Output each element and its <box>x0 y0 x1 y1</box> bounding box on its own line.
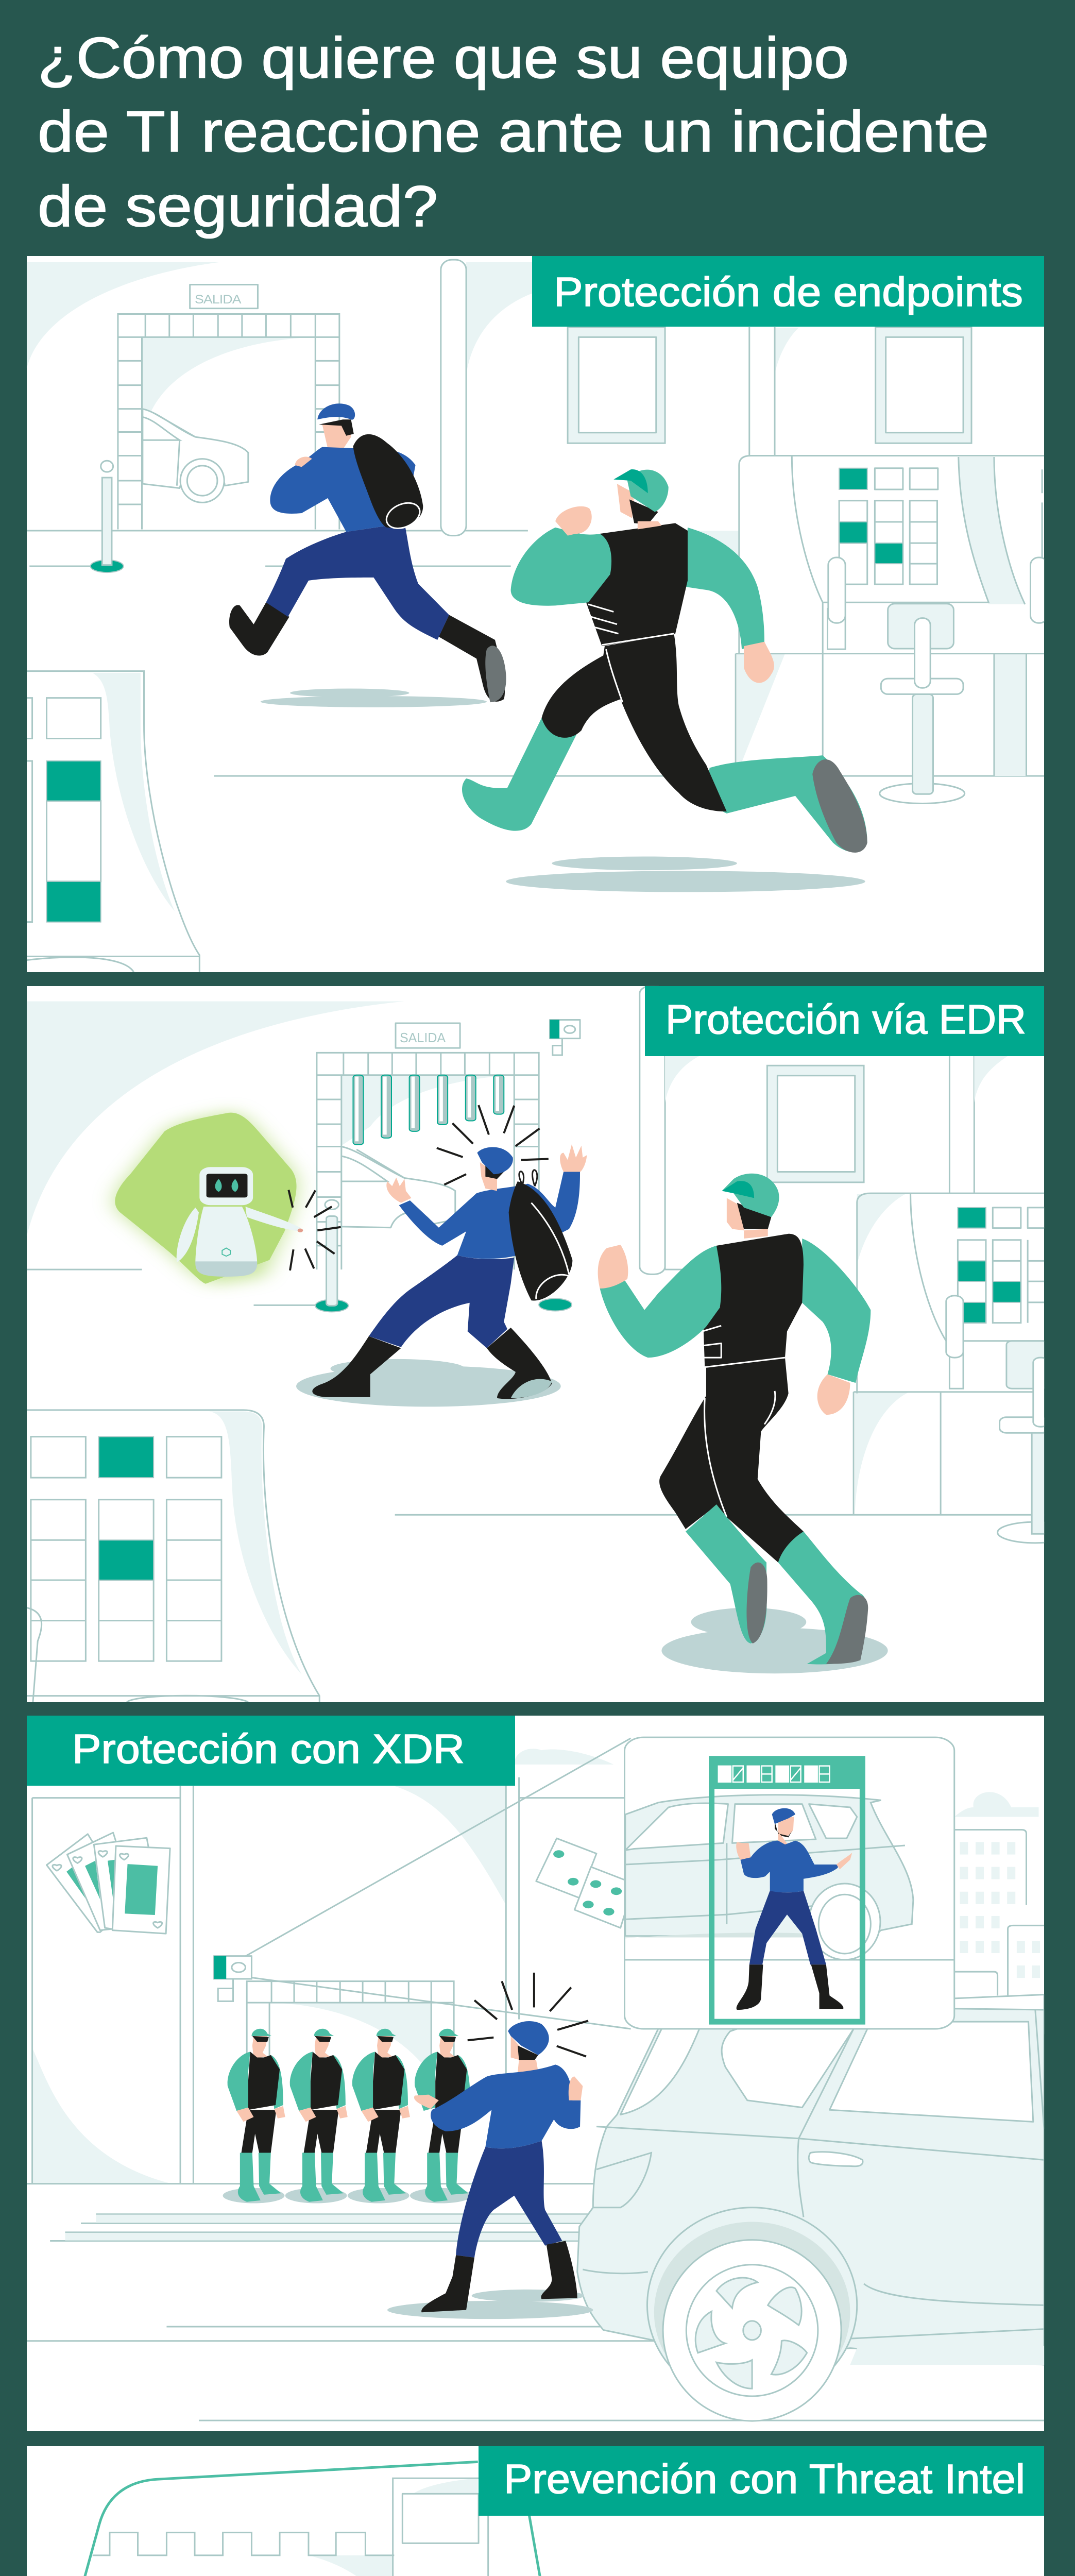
monitoring zoom panel <box>625 1737 954 2029</box>
robot with green shield <box>115 1113 303 1284</box>
slot machine right <box>854 1193 1073 1543</box>
stanchion posts <box>315 1200 572 1312</box>
label: Prevención con Threat Intel: Prevención con Threat Intel <box>504 2456 1025 2502</box>
security camera <box>550 1020 580 1055</box>
guard standing <box>598 1174 888 1673</box>
title: de seguridad? <box>38 174 438 239</box>
thief confronted <box>387 2021 593 2319</box>
slot machine right <box>686 456 1048 776</box>
large car <box>577 1994 1044 2421</box>
label: Protección de endpoints <box>532 256 1044 327</box>
car through door <box>143 409 248 502</box>
exit door <box>247 1981 454 2081</box>
panel: Protección con XDR <box>27 1716 1044 2431</box>
exit door <box>118 314 339 530</box>
panel: Protección de endpoints <box>27 256 1048 972</box>
panel: Prevención con Threat Intel <box>27 2446 1044 2576</box>
exit sign <box>396 1023 460 1048</box>
camera feed frame <box>710 1757 864 2022</box>
guard 3 <box>352 2029 410 2202</box>
car in zoom view <box>625 1795 954 1960</box>
car through door <box>342 1146 455 1228</box>
roulette table bottom left <box>27 671 199 972</box>
thief impact lines <box>468 1973 588 2057</box>
label: Protección con XDR <box>27 1716 515 1786</box>
guard 2 <box>290 2029 348 2202</box>
label: Protección vía EDR <box>645 986 1044 1056</box>
bar stool <box>880 604 965 803</box>
playing cards <box>47 1833 170 1934</box>
label: Protección de endpoints: Protección de endpoints <box>554 269 1023 315</box>
background: corridor architecture <box>27 260 1044 776</box>
guard running <box>462 469 867 892</box>
title: ¿Cómo quiere que su equipo <box>38 26 849 90</box>
line of guards <box>223 2029 472 2203</box>
thought bubble outline <box>42 2462 562 2576</box>
gate bars <box>353 1075 504 1145</box>
dice <box>536 1838 634 1928</box>
thief impact lines <box>437 1105 549 1184</box>
guard 4 <box>415 2029 470 2202</box>
exit sign: SALIDA <box>400 1030 446 1045</box>
thief caught on camera <box>736 1808 852 2010</box>
buildings through window <box>954 1830 1044 1995</box>
thief running <box>229 403 506 707</box>
background: corridor architecture <box>27 986 1044 1515</box>
exit sign <box>190 285 258 309</box>
exit sign: SALIDA <box>195 293 242 307</box>
guard 1 <box>228 2029 285 2202</box>
exit door with closed gate <box>317 1053 539 1269</box>
roulette table bottom left <box>27 1410 319 1702</box>
label: Protección con XDR: Protección con XDR <box>72 1726 465 1772</box>
background: casino hall <box>27 1749 1044 2420</box>
stanchion post <box>91 461 124 572</box>
title: de TI reaccione ante un incidente <box>38 99 989 164</box>
wall with battlement and sign <box>93 2478 488 2576</box>
robot impact lines <box>288 1190 341 1270</box>
title <box>38 26 989 239</box>
thief blocked <box>296 1144 587 1406</box>
label: Prevención con Threat Intel <box>479 2446 1044 2516</box>
label: Protección vía EDR: Protección vía EDR <box>666 996 1026 1042</box>
panel: Protección vía EDR <box>27 986 1073 1702</box>
security camera with view cone <box>214 1738 631 2029</box>
